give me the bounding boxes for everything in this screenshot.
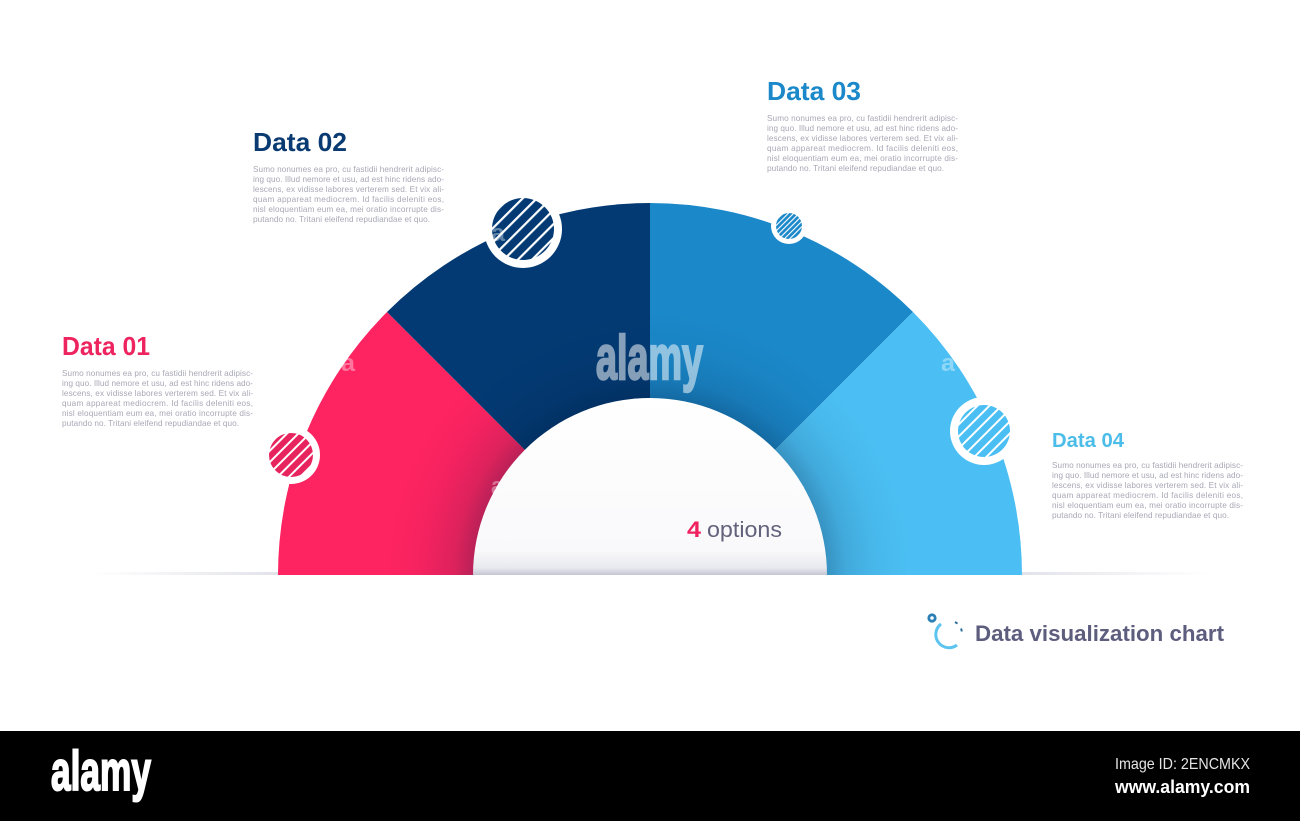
body: data 03: quam appareat mediocrem. Id facilis deleniti eos, — [767, 144, 958, 153]
chart title: Data visualization chart — [975, 621, 1225, 646]
center label: 4 options: 4 — [687, 517, 702, 542]
watermark: fragments: a — [941, 350, 956, 377]
body: data 04: ing quo. Illud nemore et usu, ad est hinc ridens ado- — [1052, 471, 1243, 480]
image id: Image ID: 2ENCMKX — [1115, 756, 1250, 773]
floor shadow — [90, 572, 1210, 575]
body: data 04: putando no. Tritani eleifend repudiandae et quo. — [1052, 511, 1229, 520]
body: data 03: nisl eloquentiam eum ea, mei oratio incorrupte dis- — [767, 154, 958, 163]
body: data 01: Sumo nonumes ea pro, cu fastidii hendrerit adipisc- — [62, 369, 253, 378]
body: data 04: lescens, ex vidisse labores verterem sed. Et vix ali- — [1052, 481, 1243, 490]
body: data 02: nisl eloquentiam eum ea, mei oratio incorrupte dis- — [253, 205, 444, 214]
body: data 04: quam appareat mediocrem. Id facilis deleniti eos, — [1052, 491, 1243, 500]
center label: 4 options: options — [707, 517, 782, 542]
watermark: fragments — [341, 220, 956, 504]
body: data 02: lescens, ex vidisse labores verterem sed. Et vix ali- — [253, 185, 444, 194]
slice: data 03 — [650, 203, 913, 575]
marker: data 03 — [771, 208, 807, 244]
marker: data 02 — [484, 190, 562, 268]
watermark: center: alamy — [596, 324, 703, 393]
slice: data 04 — [650, 312, 1022, 575]
body: data 02: Sumo nonumes ea pro, cu fastidii hendrerit adipisc- — [253, 165, 444, 174]
text block: data 03 — [767, 76, 958, 173]
body: data 04: Sumo nonumes ea pro, cu fastidii hendrerit adipisc- — [1052, 461, 1243, 470]
body: data 02 — [253, 165, 444, 224]
watermark: fragments: a — [491, 220, 506, 247]
body: data 01: nisl eloquentiam eum ea, mei oratio incorrupte dis- — [62, 409, 253, 418]
slice: data 01 — [278, 312, 650, 575]
body: data 04: nisl eloquentiam eum ea, mei oratio incorrupte dis- — [1052, 501, 1243, 510]
icon: chart logo — [929, 615, 962, 648]
body: data 03 — [767, 114, 958, 173]
body: data 03: Sumo nonumes ea pro, cu fastidii hendrerit adipisc- — [767, 114, 958, 123]
heading: data 03: Data 03 — [767, 76, 861, 106]
body: data 01: quam appareat mediocrem. Id facilis deleniti eos, — [62, 399, 253, 408]
body: data 04 — [1052, 461, 1243, 520]
slice: data 02 — [387, 203, 650, 575]
heading: data 01: Data 01 — [62, 331, 150, 361]
text block: data 04 — [1052, 430, 1243, 520]
watermark: fragments: a — [341, 350, 356, 377]
inner semicircle — [473, 398, 827, 575]
marker: data 04 — [950, 397, 1018, 465]
body: data 03: lescens, ex vidisse labores verterem sed. Et vix ali- — [767, 134, 958, 143]
semicircle chart — [278, 203, 1022, 575]
body: data 01: lescens, ex vidisse labores verterem sed. Et vix ali- — [62, 389, 253, 398]
text block: data 02 — [253, 127, 444, 224]
watermark: fragments: a — [491, 473, 504, 500]
body: data 02: ing quo. Illud nemore et usu, ad est hinc ridens ado- — [253, 175, 444, 184]
body: data 02: quam appareat mediocrem. Id facilis deleniti eos, — [253, 195, 444, 204]
watermark: fragments: a — [794, 477, 807, 504]
heading: data 02: Data 02 — [253, 127, 347, 157]
marker: data 01 — [262, 426, 320, 484]
body: data 01: putando no. Tritani eleifend repudiandae et quo. — [62, 419, 239, 428]
body: data 01: ing quo. Illud nemore et usu, ad est hinc ridens ado- — [62, 379, 253, 388]
body: data 03: ing quo. Illud nemore et usu, ad est hinc ridens ado- — [767, 124, 958, 133]
heading: data 04: Data 04 — [1052, 430, 1125, 452]
footer logo: alamy — [51, 739, 151, 802]
footer bar — [0, 731, 1300, 821]
inner shadow ring — [388, 313, 912, 575]
body: data 03: putando no. Tritani eleifend repudiandae et quo. — [767, 164, 944, 173]
body: data 02: putando no. Tritani eleifend repudiandae et quo. — [253, 215, 430, 224]
text block: data 01 — [62, 331, 253, 428]
website: www.alamy.com — [1114, 777, 1250, 797]
body: data 01 — [62, 369, 253, 428]
